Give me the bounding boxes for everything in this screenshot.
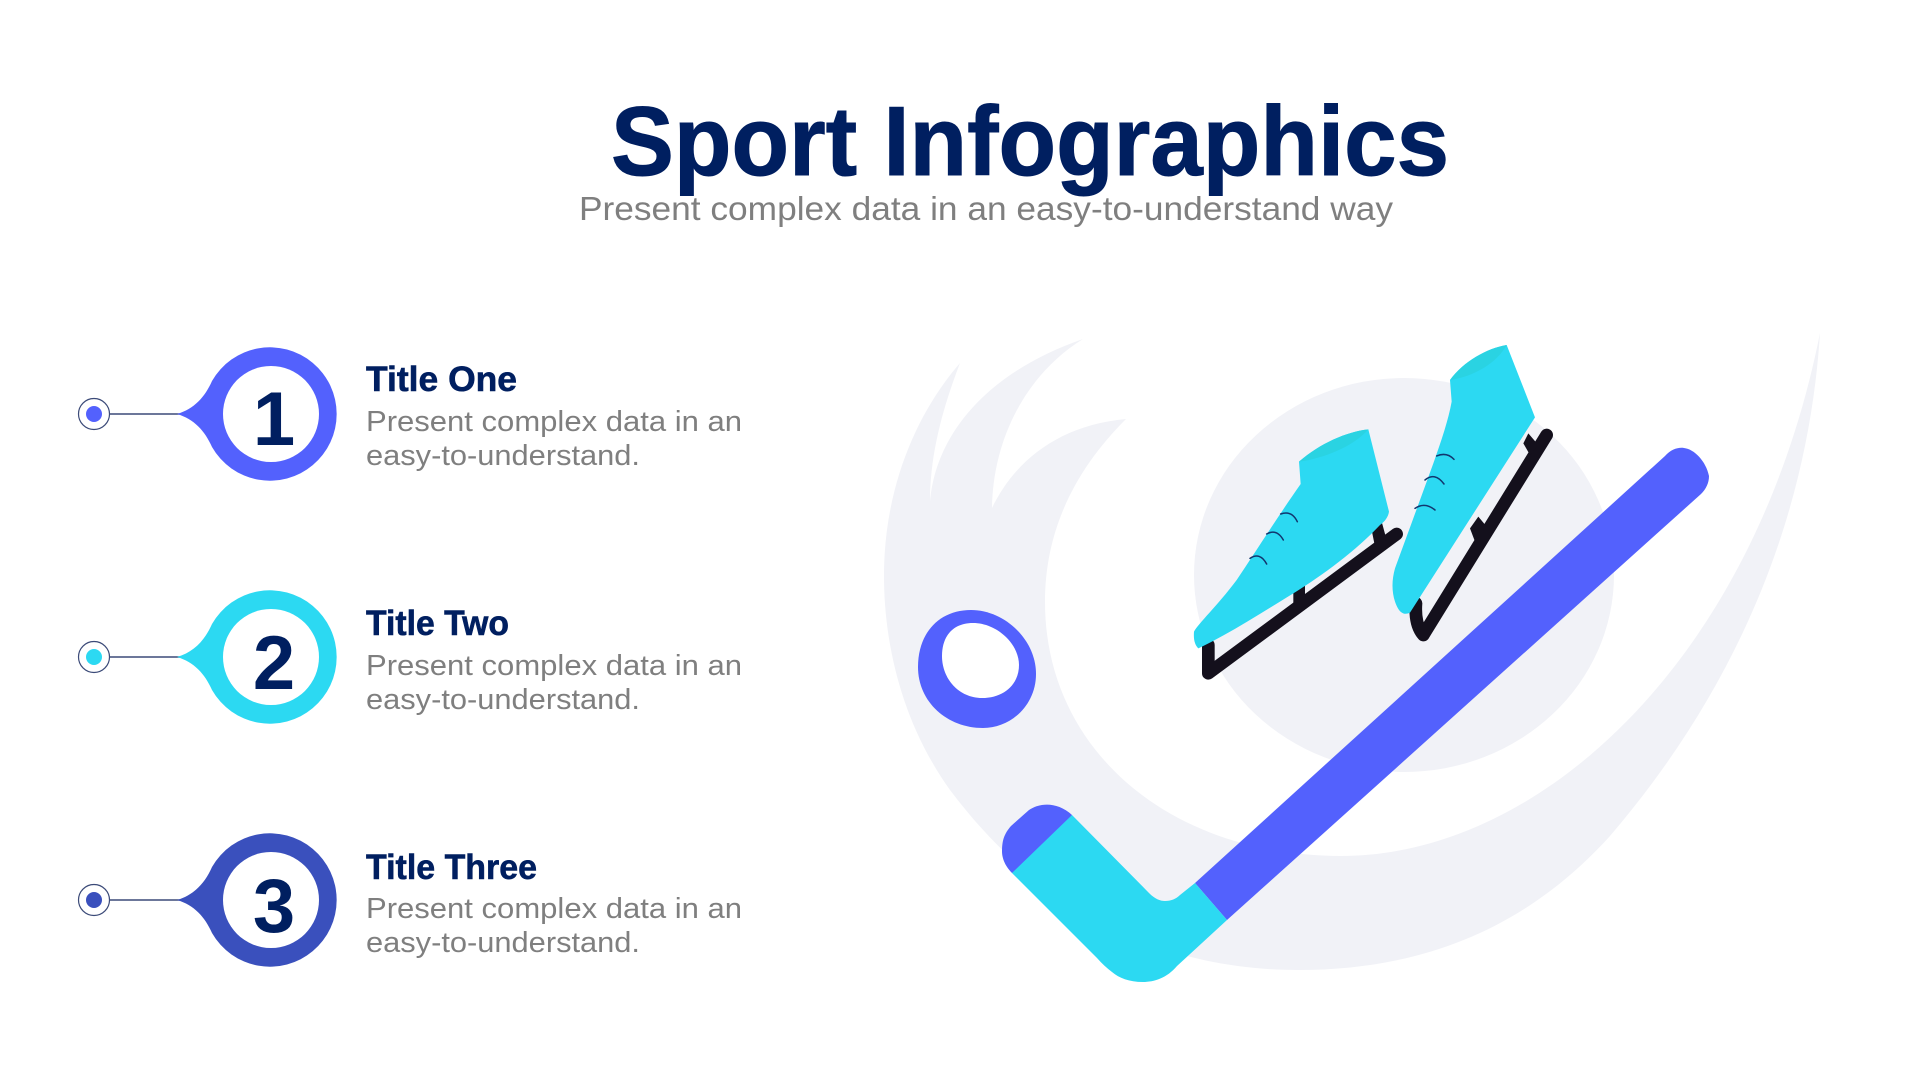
marker: small target dot 3 — [78, 884, 110, 916]
background swirl — [884, 333, 1820, 970]
description 1: easy-to-understand. — [366, 440, 640, 472]
skate right — [1392, 345, 1547, 635]
marker: small target dot 1 — [78, 398, 110, 430]
subtitle: Present complex data in an easy-to-understand way — [579, 190, 1394, 227]
number badge 2 — [177, 590, 337, 724]
title: Sport Infographics — [611, 86, 1449, 196]
number badge 3: 3 — [253, 864, 295, 949]
heading: Title Two: Title Two — [366, 604, 509, 643]
description 2: Present complex data in an — [366, 650, 742, 682]
heading: Title Three: Title Three — [366, 848, 537, 887]
skate left — [1194, 429, 1397, 673]
number badge 2: 2 — [253, 621, 295, 706]
heading: Title One: Title One — [366, 360, 517, 399]
marker: small target dot 2 — [78, 642, 110, 672]
hockey puck ring — [918, 610, 1036, 728]
list item 2 — [78, 590, 742, 724]
description 3: easy-to-understand. — [366, 927, 640, 959]
background circle — [1194, 378, 1614, 772]
connector line 2 — [110, 656, 183, 658]
ice skates — [1194, 345, 1547, 673]
connector line 3 — [110, 899, 183, 901]
number badge 1 — [177, 347, 337, 481]
number badge 1: 1 — [253, 377, 295, 462]
description 2: easy-to-understand. — [366, 684, 640, 716]
description 3: Present complex data in an — [366, 893, 742, 925]
illustration: hockey scene — [884, 333, 1820, 982]
connector line 1 — [110, 413, 183, 415]
hockey stick — [1002, 448, 1709, 982]
number badge 3 — [177, 833, 337, 967]
description 1: Present complex data in an — [366, 406, 742, 438]
list item 1 — [78, 347, 742, 481]
list item 3 — [78, 833, 742, 967]
